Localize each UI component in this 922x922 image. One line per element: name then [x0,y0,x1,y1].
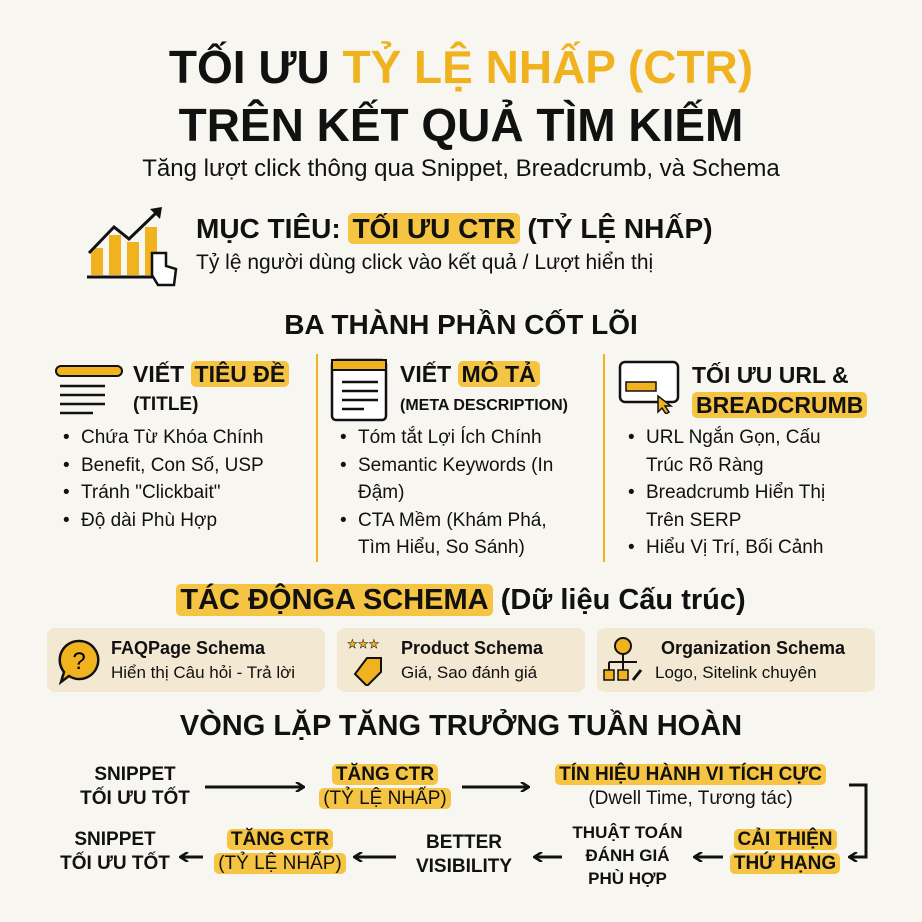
card: FAQ schema: FAQPage Schema [111,638,265,658]
loop diagram: BETTER [426,832,502,853]
loop diagram: CẢI THIỆN [738,829,832,850]
loop diagram: TÍN HIỆU HÀNH VI TÍCH CỰC [559,764,822,785]
loop diagram: SNIPPET [74,829,156,850]
card: organization schema: Organization Schema [661,638,845,658]
panel: title: Benefit, Con Số, USP [81,454,264,476]
loop diagram: (TỶ LỆ NHẤP) [218,853,342,874]
icon: title lines [55,365,123,414]
title [169,41,753,151]
loop diagram: TĂNG CTR [336,764,434,785]
heading: growth loop: VÒNG LẶP TĂNG TRƯỞNG TUẦN HOÀN [180,710,742,742]
panel: title: VIẾT TIÊU ĐỀ [133,361,285,387]
loop diagram: PHÙ HỢP [588,869,667,888]
panel: url breadcrumb: Hiểu Vị Trí, Bối Cảnh [646,537,823,558]
heading: schema: TÁC ĐỘNGA SCHEMA (Dữ liệu Cấu trúc) [180,584,746,616]
loop diagram: VISIBILITY [416,856,512,877]
panel: meta description [330,358,568,558]
card: organization schema [597,628,875,692]
panel: title: Tránh "Clickbait" [81,482,220,503]
panel: meta description: (META DESCRIPTION) [400,397,568,414]
loop diagram: THỨ HẠNG [734,853,836,874]
icon: stars and tag [347,637,382,686]
goal text [196,213,713,274]
loop diagram: TỐI ƯU TỐT [80,788,190,809]
panel: title: Chứa Từ Khóa Chính [81,427,263,448]
title: TRÊN KẾT QUẢ TÌM KIẾM [179,99,743,151]
loop diagram: THUẬT TOÁN [572,823,683,842]
loop diagram: SNIPPET [94,764,176,785]
panel: url breadcrumb [618,360,867,558]
subtitle: Tăng lượt click thông qua Snippet, Breadcrumb, và Schema [142,155,780,182]
panel: title [55,361,289,530]
panel: meta description: Tóm tắt Lợi Ích Chính [358,427,542,448]
arrows [179,782,868,862]
panel: url breadcrumb: Breadcrumb Hiển Thị Trên SERP [646,482,825,530]
icon: document [330,358,388,422]
goal text: Tỷ lệ người dùng click vào kết quả / Lượt hiển thị [196,251,653,274]
card: FAQ schema: Hiển thị Câu hỏi - Trả lời [111,663,295,682]
icon: browser with cursor [618,360,680,414]
card: organization schema: Logo, Sitelink chuyên [655,663,817,682]
icon: stars and tag: ★★★ [347,637,379,651]
loop diagram [60,762,868,888]
card: product schema: Giá, Sao đánh giá [401,663,537,682]
card: FAQ schema [47,628,325,692]
goal text: MỤC TIÊU: TỐI ƯU CTR (TỶ LỆ NHẤP) [196,213,713,244]
panel: url breadcrumb: TỐI ƯU URL & [692,362,849,388]
loop diagram: ĐÁNH GIÁ [585,846,670,865]
panel: meta description: VIẾT MÔ TẢ [400,361,536,387]
panel: title: Độ dài Phù Hợp [81,510,217,530]
panel: title: (TITLE) [133,394,198,415]
loop diagram: (Dwell Time, Tương tác) [588,788,793,809]
panel: meta description: Semantic Keywords (In Đậm) [358,454,553,503]
title: TỐI ƯU TỶ LỆ NHẤP (CTR) [169,41,753,93]
loop diagram: TĂNG CTR [231,829,329,850]
card: product schema: Product Schema [401,638,543,658]
card: product schema [337,628,585,692]
icon: org chart [603,637,642,681]
icon: question bubble: ? [72,648,86,675]
icon: chart with hand [87,207,178,286]
panel: url breadcrumb: BREADCRUMB [696,392,863,418]
panel: meta description: CTA Mềm (Khám Phá, Tìm Hiểu, So Sánh) [358,510,547,558]
loop diagram: (TỶ LỆ NHẤP) [323,788,447,809]
loop diagram: TỐI ƯU TỐT [60,853,170,874]
panel: url breadcrumb: URL Ngắn Gọn, Cấu Trúc Rõ Ràng [646,427,821,476]
heading: core components: BA THÀNH PHẦN CỐT LÕI [284,309,638,340]
icon: question bubble [58,640,100,686]
